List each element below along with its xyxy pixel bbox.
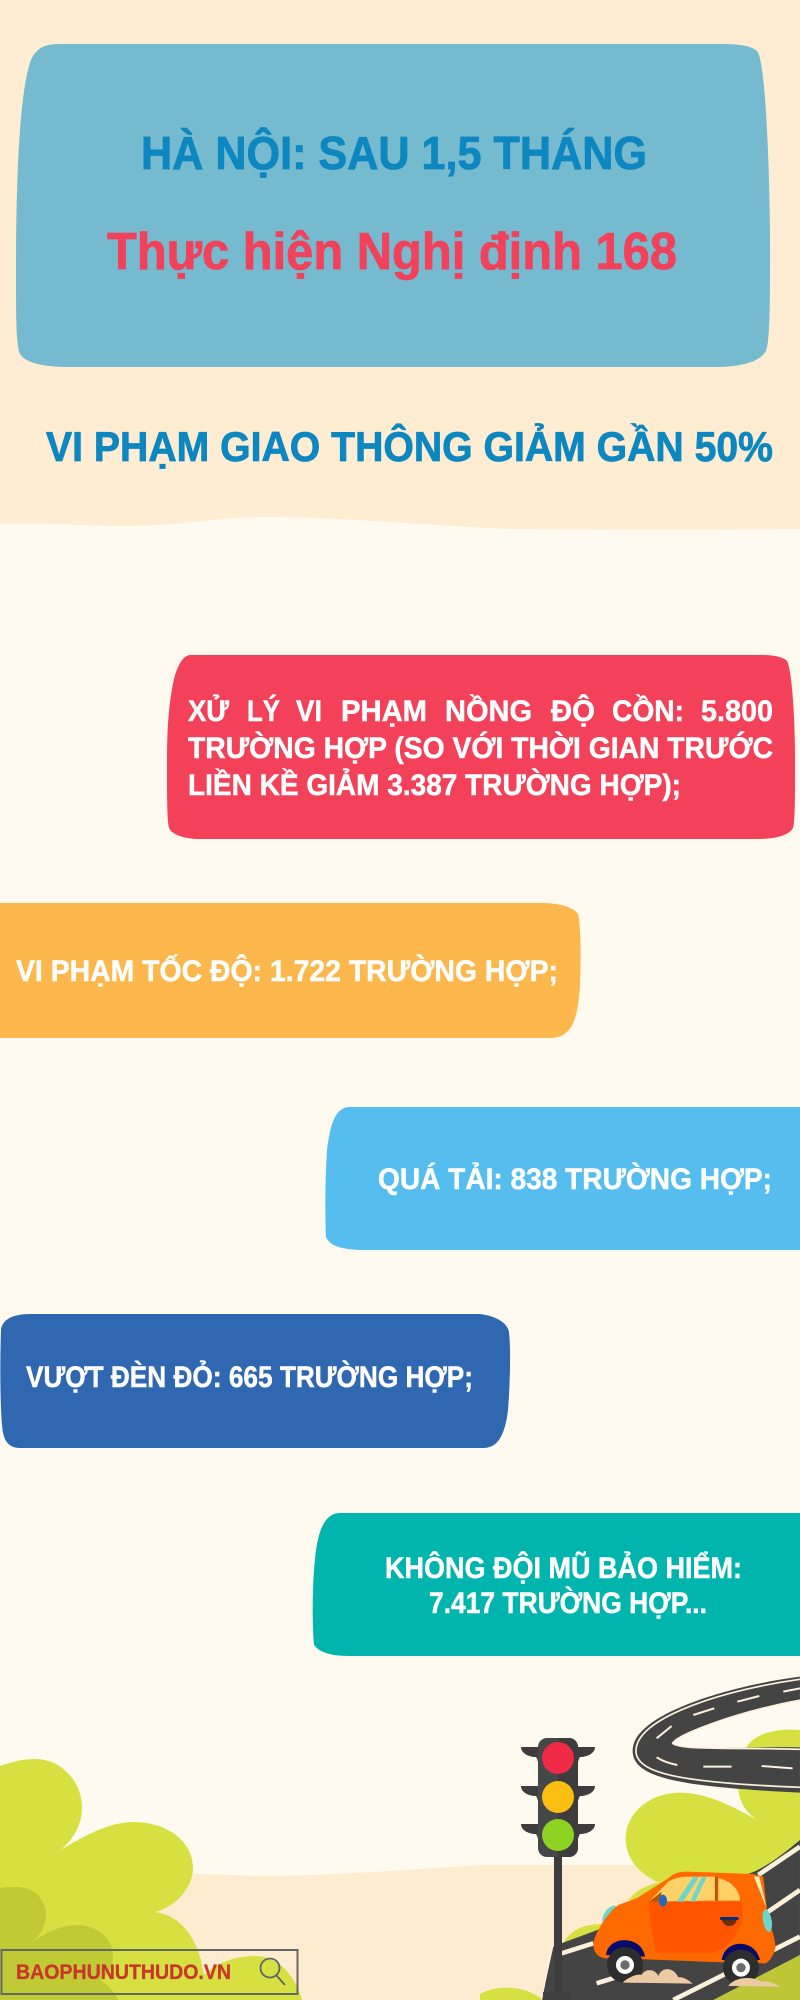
- text: justified line 1: [188, 694, 773, 728]
- panel: quá tải: [325, 1107, 800, 1250]
- text: QUÁ TẢI: 838 TRƯỜNG HỢP;: [378, 1162, 772, 1196]
- text: justified line 1: NỒNG: [445, 694, 532, 728]
- panel: vi phạm tốc độ: [0, 903, 581, 1038]
- left bush shadow: [0, 1887, 118, 2000]
- panel: nồng độ cồn: [167, 655, 795, 839]
- text line 2: 7.417 TRƯỜNG HỢP...: [429, 1586, 707, 1620]
- left bush: [0, 1759, 302, 2000]
- icon: magnifier: [260, 1958, 285, 1985]
- wheels: [607, 1947, 643, 1983]
- text: justified line 1: PHẠM: [341, 695, 427, 728]
- text: line 3: LIỀN KỀ GIẢM 3.387 TRƯỜNG HỢP);: [188, 768, 681, 802]
- text: VƯỢT ĐÈN ĐỎ: 665 TRƯỜNG HỢP;: [26, 1360, 473, 1394]
- panel: vượt đèn đỏ: [0, 1314, 510, 1448]
- text: justified line 1: CỒN:: [612, 694, 684, 728]
- dust: [623, 1969, 693, 1984]
- text: VI PHẠM TỐC ĐỘ: 1.722 TRƯỜNG HỢP;: [16, 954, 558, 988]
- icon: traffic light: [521, 1738, 595, 2000]
- panel: không đội mũ bảo hiểm: [313, 1513, 800, 1656]
- text: justified line 1: LÝ: [247, 694, 280, 728]
- text: justified line 1: VI: [296, 695, 322, 728]
- road: lower stretch: [542, 1840, 800, 2000]
- text: justified line 1: XỬ: [188, 694, 229, 728]
- header background band: [0, 0, 800, 530]
- ground band: [0, 1865, 800, 2000]
- roadside scenery: [480, 1677, 800, 2000]
- logo box: [2, 1950, 298, 1994]
- text: line 2: TRƯỜNG HỢP (SO VỚI THỜI GIAN TRƯỚC: [188, 731, 773, 765]
- text: justified line 1: 5.800: [701, 695, 773, 728]
- road: upper curve: [633, 1677, 800, 1793]
- lower right dark bush: [713, 1955, 800, 2000]
- text line 1: KHÔNG ĐỘI MŨ BẢO HIỂM:: [385, 1551, 742, 1585]
- right bushes: [480, 1730, 800, 2000]
- logo text: BAOPHUNUTHUDO.VN: [16, 1961, 231, 1984]
- icon: orange car: [593, 1872, 780, 1987]
- title line 2: Thực hiện Nghị định 168: [107, 223, 677, 281]
- panel: title box: [16, 44, 770, 367]
- text: justified line 1: ĐỘ: [551, 694, 595, 728]
- title line 1: HÀ NỘI: SAU 1,5 THÁNG: [141, 127, 647, 179]
